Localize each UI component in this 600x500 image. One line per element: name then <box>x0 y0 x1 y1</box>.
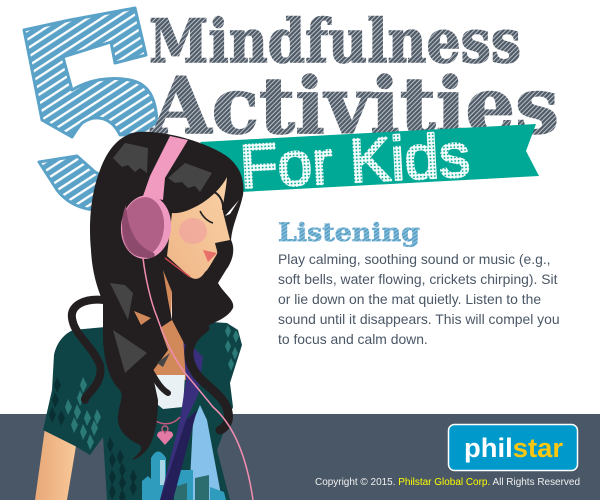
skin patch <box>134 311 151 325</box>
shirt <box>43 320 242 500</box>
hair curls <box>72 300 228 430</box>
hair highlights <box>110 143 212 373</box>
dark diamonds <box>49 377 137 500</box>
body text: soft bells, water flowing, crickets chirping). Sit <box>278 271 558 287</box>
ribbon label: For Kids <box>238 121 471 202</box>
blush <box>179 218 207 244</box>
light blue collar <box>108 345 150 395</box>
hair back and mass <box>90 132 243 460</box>
title: Activities: Activities <box>150 61 559 152</box>
lips <box>203 250 217 262</box>
body text: or lie down on the mat quietly. Listen to the <box>278 291 541 307</box>
sleeve diamonds <box>65 325 239 450</box>
headphone cord <box>143 258 253 500</box>
logo: philstar: philstar <box>464 433 563 463</box>
jaw line <box>165 258 190 277</box>
white tank top <box>140 375 185 409</box>
girl illustration <box>35 132 253 500</box>
headphones <box>118 136 188 261</box>
face <box>165 177 230 279</box>
ribbon: For Kids <box>200 121 539 202</box>
city: buildings <box>142 452 226 500</box>
title: Mindfulness: Mindfulness <box>149 7 521 77</box>
body text: to focus and calm down. <box>278 331 428 347</box>
shoulder strap <box>160 322 203 500</box>
closed eye <box>200 211 213 223</box>
numeral 5 <box>24 8 157 210</box>
logo: philstar <box>448 424 578 470</box>
arm <box>35 428 76 500</box>
city: tower <box>189 405 222 500</box>
skin neck and chest <box>145 258 200 380</box>
necklace <box>147 412 180 445</box>
white hair gap <box>225 200 239 216</box>
footer band <box>0 414 600 500</box>
body text: Play calming, soothing sound or music (e.g., <box>278 251 551 267</box>
heading: Listening: Listening <box>278 218 420 247</box>
copyright line: Copyright © 2015. Philstar Global Corp. All Rights Reserved <box>315 476 580 488</box>
body text: sound until it disappears. This will compel you <box>278 311 560 327</box>
eyebrow <box>212 191 223 210</box>
